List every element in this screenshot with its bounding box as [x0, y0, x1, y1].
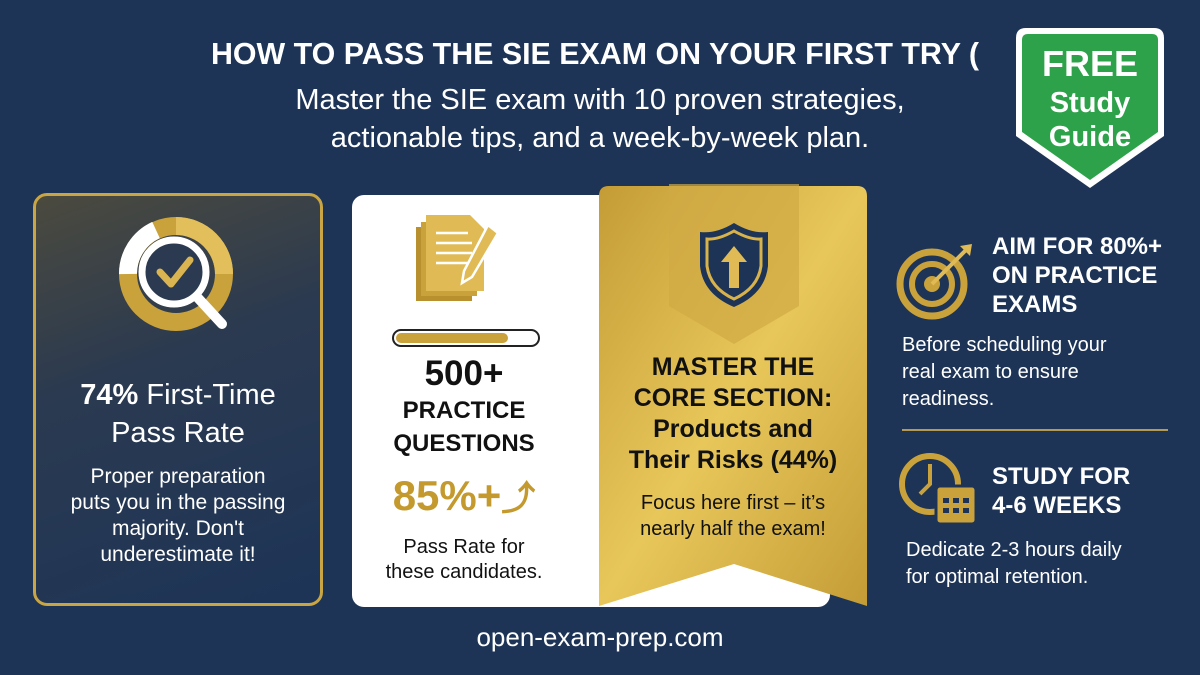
body: for optimal retention. [906, 566, 1088, 588]
panel: gold ribbon core section [599, 184, 867, 606]
icon: shield arrow [700, 223, 768, 307]
heading: Their Risks (44%) [629, 446, 837, 474]
heading: CORE SECTION: [634, 384, 832, 412]
stat: 500+: 500+ [425, 354, 503, 393]
stat heading: 74% First-Time [80, 379, 276, 411]
icon: clock calendar [899, 453, 974, 522]
panel: pass rate [33, 193, 323, 606]
tip: aim for 80% [896, 233, 1162, 410]
body: Before scheduling your [902, 334, 1107, 356]
body: readiness. [902, 388, 994, 410]
body [906, 539, 1122, 588]
stat: 85%: 85%+⤴ [393, 472, 535, 519]
body text: puts you in the passing [71, 491, 285, 514]
caption [386, 536, 542, 583]
badge: free study guide [1016, 28, 1164, 188]
progress bar [392, 329, 540, 347]
stat: 500+: PRACTICE [403, 397, 525, 424]
subtitle: actionable tips, and a week-by-week plan. [331, 122, 869, 154]
panel: white card [352, 195, 830, 607]
heading: MASTER THE [652, 353, 814, 381]
body: Dedicate 2-3 hours daily [906, 539, 1122, 561]
panel: practice questions [386, 215, 542, 583]
badge: free study guide: FREE [1042, 43, 1138, 84]
heading [992, 233, 1162, 318]
icon: target [896, 244, 972, 320]
subtitle: Master the SIE exam with 10 proven strategies, [295, 84, 905, 116]
body: real exam to ensure [902, 361, 1079, 383]
badge: free study guide: Guide [1049, 121, 1131, 153]
heading: STUDY FOR [992, 463, 1130, 490]
stat: 500+ [393, 354, 535, 457]
heading: AIM FOR 80%+ [992, 233, 1162, 260]
heading: 4-6 WEEKS [992, 492, 1121, 519]
tip: study weeks [899, 453, 1130, 588]
heading: EXAMS [992, 291, 1077, 318]
heading: ON PRACTICE [992, 262, 1157, 289]
footer url: open-exam-prep.com [476, 622, 724, 652]
stat: 500+: QUESTIONS [393, 430, 535, 457]
icon: document pencil [416, 215, 496, 301]
heading: Products and [653, 415, 813, 443]
badge: free study guide: Study [1050, 87, 1130, 119]
body: Focus here first – it’s [641, 492, 825, 514]
icon: magnifier check [119, 217, 233, 331]
body: nearly half the exam! [640, 518, 826, 540]
body text [71, 465, 285, 566]
body text: Proper preparation [90, 465, 266, 488]
subtitle [295, 84, 905, 154]
caption: Pass Rate for [403, 536, 525, 558]
heading [629, 353, 837, 474]
title: HOW TO PASS THE SIE EXAM ON YOUR FIRST TRY ( [211, 36, 979, 71]
caption: these candidates. [386, 561, 542, 583]
body [902, 334, 1107, 410]
heading [992, 463, 1130, 519]
body text: majority. Don't [112, 517, 244, 540]
stat heading [80, 379, 276, 449]
body [640, 492, 826, 540]
stat heading: Pass Rate [111, 417, 245, 449]
body text: underestimate it! [100, 543, 256, 566]
